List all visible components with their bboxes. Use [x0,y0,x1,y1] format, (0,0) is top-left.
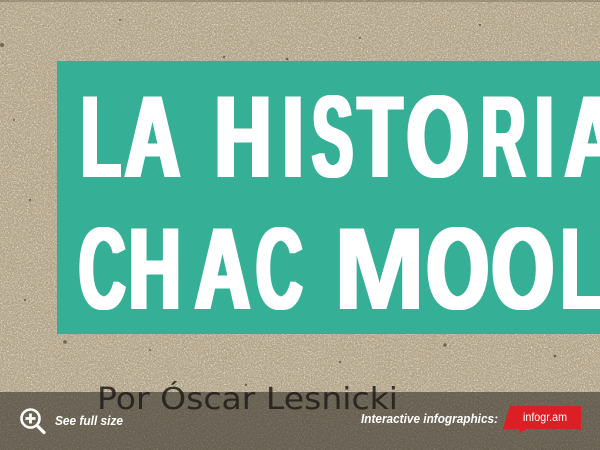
icon: magnifier [22,410,44,432]
title line 1: R [480,71,525,202]
title line 2: H [129,203,181,334]
infogr.am badge [503,406,581,433]
title line 1 [80,71,600,202]
title line 1: S [312,71,353,202]
interactive infographics label: Interactive infographics: [361,411,498,426]
title line 1: I [282,71,302,202]
title line 2: O [427,203,489,334]
title line 2: L [560,203,600,334]
title line 1: O [407,71,469,202]
title line 1: L [80,71,120,202]
title line 1: A [125,71,180,202]
title line 2: O [492,203,554,334]
see full size link: See full size [55,414,123,428]
infogr.am badge: infogr.am [523,410,567,424]
author credit: Por Óscar Lesnicki [97,380,398,417]
title line 2: C [256,203,303,334]
title line 2: A [195,203,250,334]
title line 1: T [358,71,402,202]
title line 1: H [215,71,271,202]
title line 1: I [535,71,553,202]
title text [79,71,600,334]
title line 2 [79,203,600,334]
title line 2: M [334,203,424,334]
title panel [57,61,600,334]
bottom toolbar [0,392,600,450]
title line 2: C [79,203,126,334]
